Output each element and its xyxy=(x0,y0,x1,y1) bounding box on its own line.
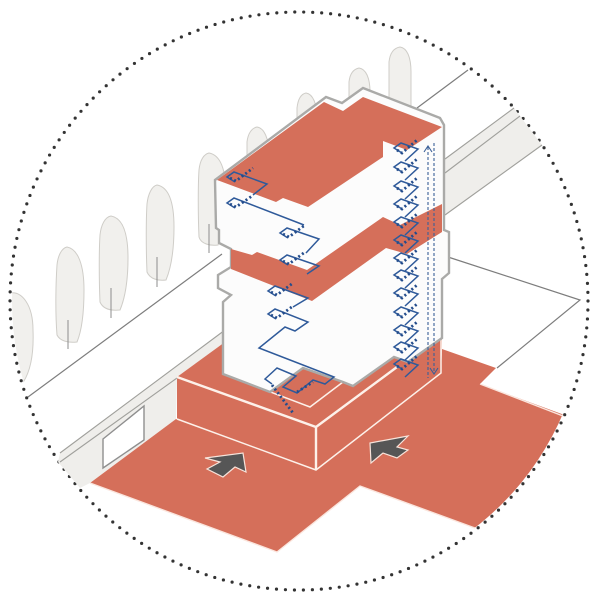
window opening xyxy=(103,406,144,468)
podium xyxy=(177,338,442,470)
trees xyxy=(5,47,411,384)
vertical dashed circulation arrows xyxy=(424,143,438,378)
ground plane xyxy=(90,349,570,560)
building volume xyxy=(215,88,449,392)
arrow right xyxy=(370,436,408,463)
arrow left xyxy=(205,453,246,477)
pavement and wall left xyxy=(58,330,225,488)
left circulation route xyxy=(227,172,334,393)
right stair column xyxy=(394,140,418,377)
tree trunks xyxy=(68,224,209,349)
red mid floor band xyxy=(231,204,442,301)
red roof xyxy=(217,97,442,207)
road edge lines xyxy=(28,70,580,397)
pavement right xyxy=(445,108,542,215)
stair dots xyxy=(230,168,313,413)
